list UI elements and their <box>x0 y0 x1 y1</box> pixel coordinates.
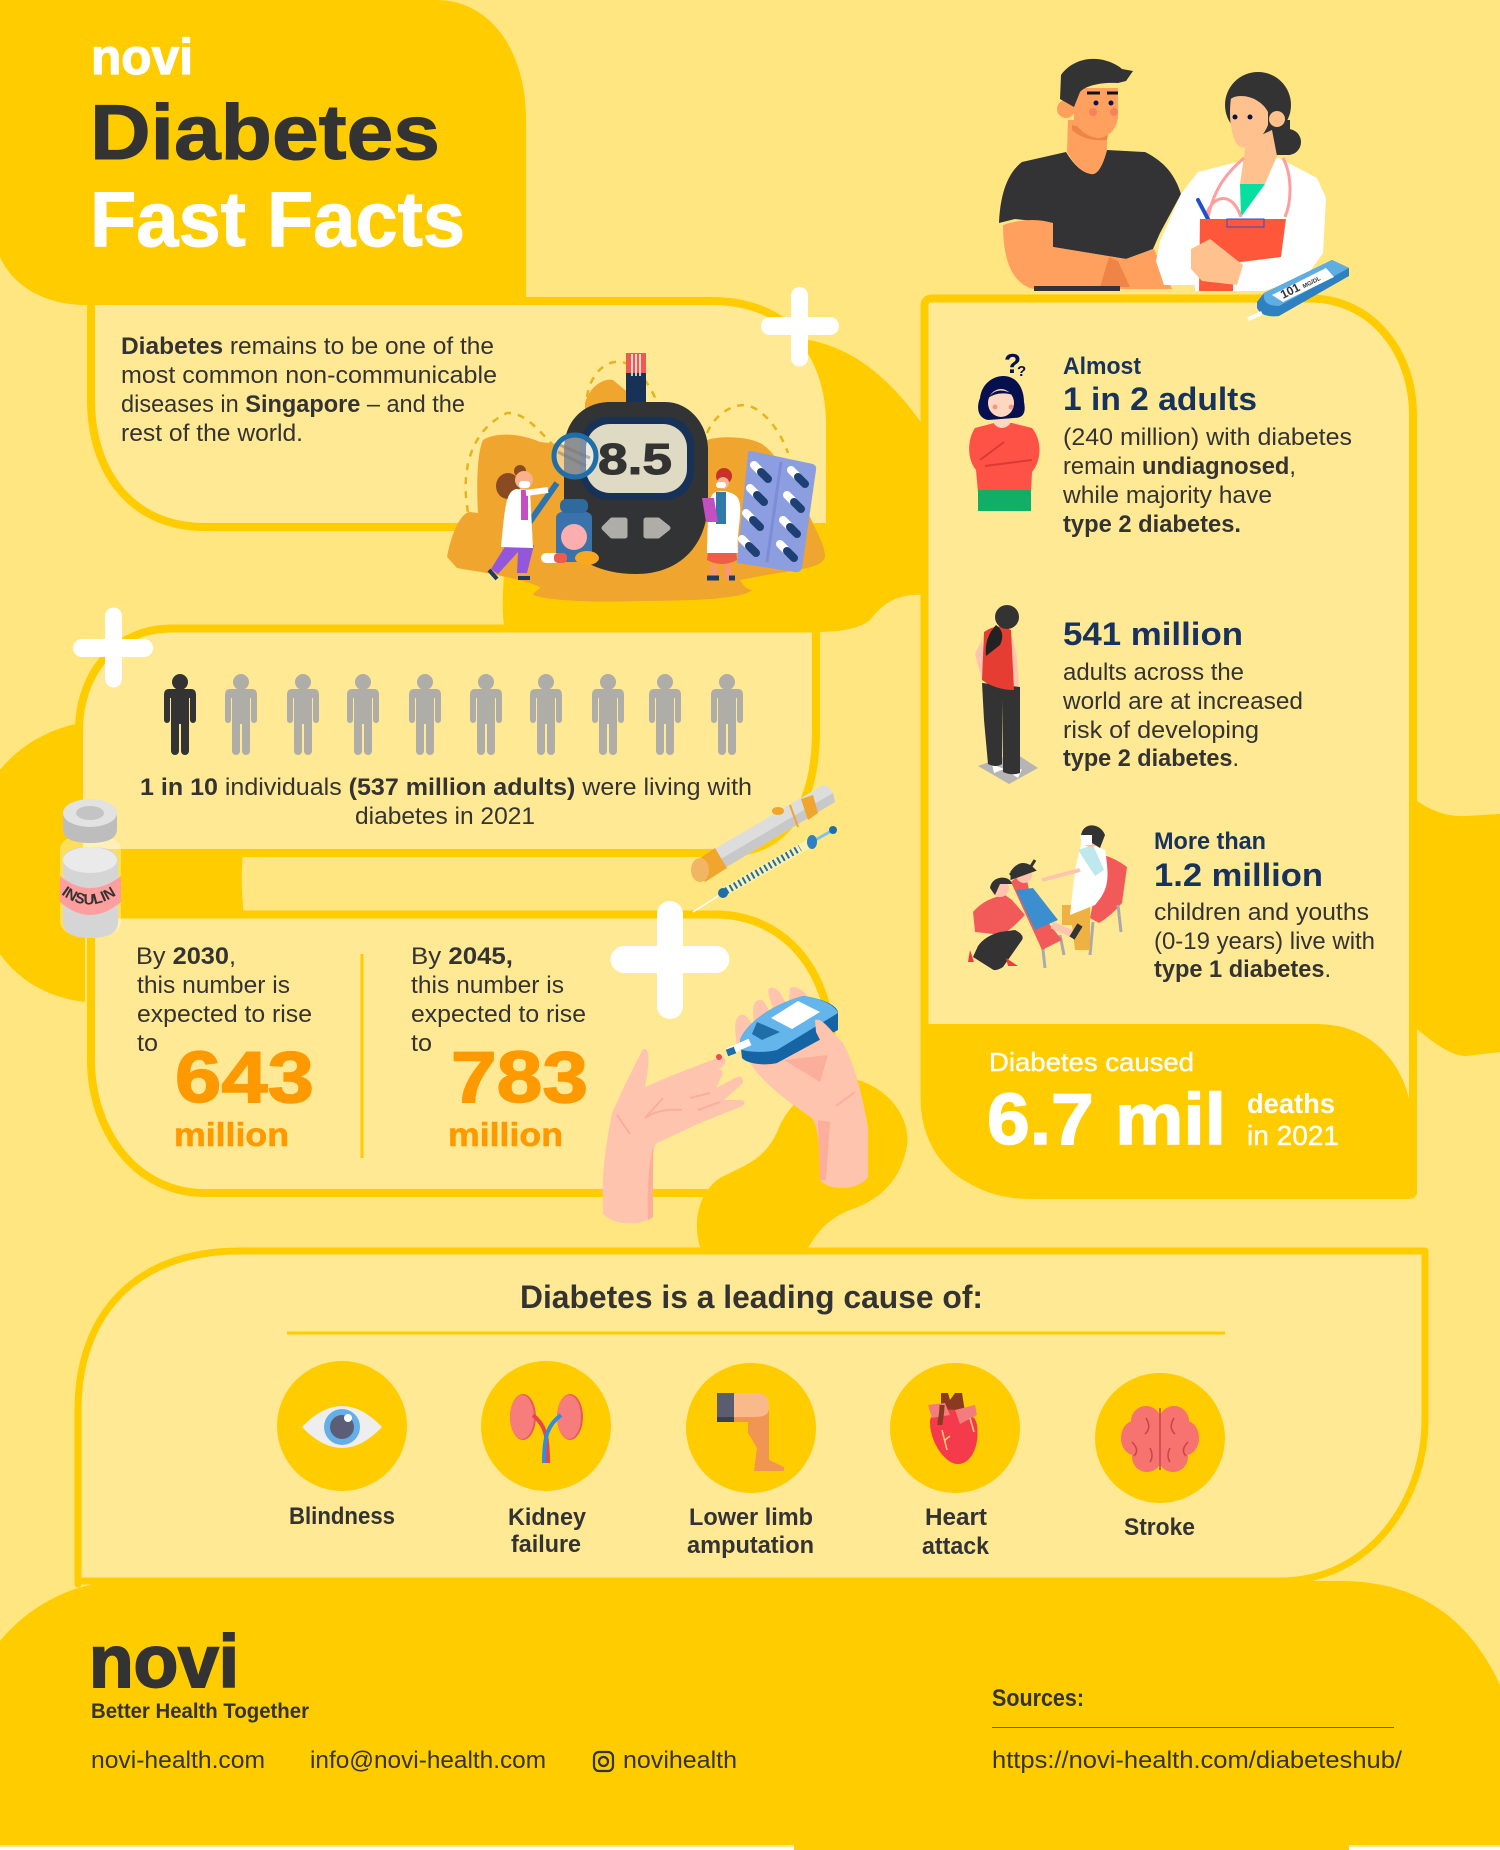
projection 2045: this number is <box>411 972 564 999</box>
sources heading: Sources: <box>992 1685 1084 1712</box>
statistic: 1 in 2 adults: remain undiagnosed, <box>1063 453 1296 480</box>
statistic: 1.2 million: (0-19 years) live with <box>1154 928 1375 955</box>
cause: lower limb amputation <box>686 1363 816 1559</box>
panel: leading causes <box>78 1251 1425 1584</box>
icon: thinking woman <box>969 348 1040 511</box>
icon: thinking woman: ? <box>1017 363 1026 380</box>
statistic: 1 in 2 adults: (240 million) with diabetes <box>1063 424 1352 451</box>
title line one: Diabetes <box>90 88 440 176</box>
header blob with title <box>0 0 526 305</box>
illustration: hands testing blood sugar <box>603 987 868 1223</box>
illustration: insulin pen and syringe <box>691 785 837 912</box>
cause: blindness: Blindness <box>289 1503 395 1530</box>
projection 2045: By 2045, <box>411 943 513 970</box>
instagram handle: novihealth <box>623 1747 737 1774</box>
statistic: 1 in 2 adults: 1 in 2 adults <box>1063 381 1257 417</box>
intro text: Diabetes remains to be one of the <box>121 333 494 360</box>
illustration: glucose meter scene: 8.5 <box>598 435 672 484</box>
panel: intro <box>91 301 830 527</box>
cause: blindness <box>277 1361 407 1530</box>
projection 2030: 643 <box>175 1038 314 1118</box>
email: info@novi-health.com <box>310 1747 546 1774</box>
row of ten people icons <box>164 674 743 755</box>
decorative plus: left <box>73 608 153 688</box>
projection 2030 <box>136 943 314 1153</box>
decorative plus: large <box>610 901 730 1019</box>
icon: instagram <box>594 1752 613 1771</box>
icon: thinking woman: ? <box>1004 348 1021 379</box>
intro text <box>121 333 497 447</box>
statistic: 541 million: world are at increased <box>1062 688 1303 715</box>
projection 2030: expected to rise <box>137 1001 312 1028</box>
cause: lower limb amputation: Lower limb <box>689 1504 813 1531</box>
statistic: 541 million: risk of developing <box>1063 717 1259 744</box>
statistic: 1 in 2 adults: Almost <box>1063 353 1141 380</box>
intro text: most common non-communicable <box>121 362 497 389</box>
cause: kidney failure: Kidney <box>508 1504 587 1531</box>
footer logo: novi <box>89 1620 239 1703</box>
illustration: patient and doctor <box>999 59 1326 291</box>
tagline: Better Health Together <box>91 1700 309 1723</box>
caption: diabetes in 2021 <box>355 803 535 830</box>
illustration: small glucose meter: 101 MG/DL <box>1278 270 1323 302</box>
illustration: insulin vial: INSULIN <box>62 886 116 905</box>
cause: heart attack <box>890 1363 1020 1560</box>
illustration: small glucose meter <box>1248 260 1349 319</box>
callout: 6.7 mil deaths <box>921 1024 1417 1199</box>
source link: https://novi-health.com/diabeteshub/ <box>992 1747 1402 1774</box>
projection 2045: 783 <box>451 1038 588 1118</box>
icon: person on scale <box>975 605 1038 784</box>
cause: heart attack: attack <box>922 1533 990 1560</box>
panel: 1 in 10 individuals <box>79 628 816 853</box>
cause: kidney failure: failure <box>511 1531 581 1558</box>
footer <box>0 1581 1500 1850</box>
cause: stroke: Stroke <box>1124 1514 1195 1541</box>
section heading: Diabetes is a leading cause of: <box>520 1279 983 1315</box>
callout: 6.7 mil deaths: in 2021 <box>1247 1120 1339 1151</box>
callout: 6.7 mil deaths: Diabetes caused <box>989 1047 1194 1077</box>
projection 2045: million <box>448 1116 563 1153</box>
projection 2030: this number is <box>137 972 290 999</box>
caption: 1 in 10 individuals (537 million adults) were living with <box>140 774 752 801</box>
panel: projections <box>91 914 833 1193</box>
heading rule <box>287 1332 1225 1334</box>
statistic: 1 in 2 adults: type 2 diabetes. <box>1063 511 1241 538</box>
statistic: 541 million: adults across the <box>1063 659 1244 686</box>
statistic: 541 million: 541 million <box>1063 616 1243 652</box>
intro text: rest of the world. <box>121 420 303 447</box>
projection 2045 <box>411 943 588 1153</box>
projection 2030: million <box>174 1116 289 1153</box>
projection 2030: By 2030, <box>136 943 236 970</box>
illustration: insulin vial <box>60 799 121 938</box>
website: novi-health.com <box>91 1747 265 1774</box>
divider <box>360 954 364 1158</box>
statistic: 541 million <box>1062 616 1303 772</box>
statistic: 1.2 million: 1.2 million <box>1154 857 1323 893</box>
statistic: 541 million: type 2 diabetes. <box>1063 745 1239 772</box>
brand name: novi <box>91 29 193 85</box>
decorative plus: intro <box>761 287 839 367</box>
statistic: 1.2 million: children and youths <box>1154 899 1369 926</box>
callout: 6.7 mil deaths: 6.7 mil <box>987 1080 1226 1160</box>
cause: lower limb amputation: amputation <box>687 1532 814 1559</box>
icon: child with nurse <box>968 825 1127 970</box>
background yellow blobs <box>0 340 1500 1056</box>
cause: stroke <box>1095 1373 1225 1541</box>
title line two: Fast Facts <box>90 175 465 263</box>
blob behind hands <box>697 1079 907 1255</box>
statistic: 1.2 million: type 1 diabetes. <box>1154 956 1331 983</box>
projection 2045: expected to rise <box>411 1001 586 1028</box>
statistic: 1.2 million <box>1154 828 1375 983</box>
sources rule <box>992 1727 1394 1728</box>
statistic: 1.2 million: More than <box>1154 828 1266 855</box>
projection 2030: to <box>137 1030 158 1057</box>
projection 2045: to <box>411 1030 432 1057</box>
callout: 6.7 mil deaths: deaths <box>1247 1088 1335 1119</box>
cause: kidney failure <box>481 1361 611 1558</box>
panel: global statistics <box>921 298 1417 1199</box>
caption <box>140 774 752 830</box>
statistic: 1 in 2 adults <box>1062 353 1352 538</box>
illustration: glucose meter scene <box>447 353 825 602</box>
statistic: 1 in 2 adults: while majority have <box>1062 482 1272 509</box>
cause: heart attack: Heart <box>925 1504 987 1531</box>
intro text: diseases in Singapore – and the <box>121 391 465 418</box>
